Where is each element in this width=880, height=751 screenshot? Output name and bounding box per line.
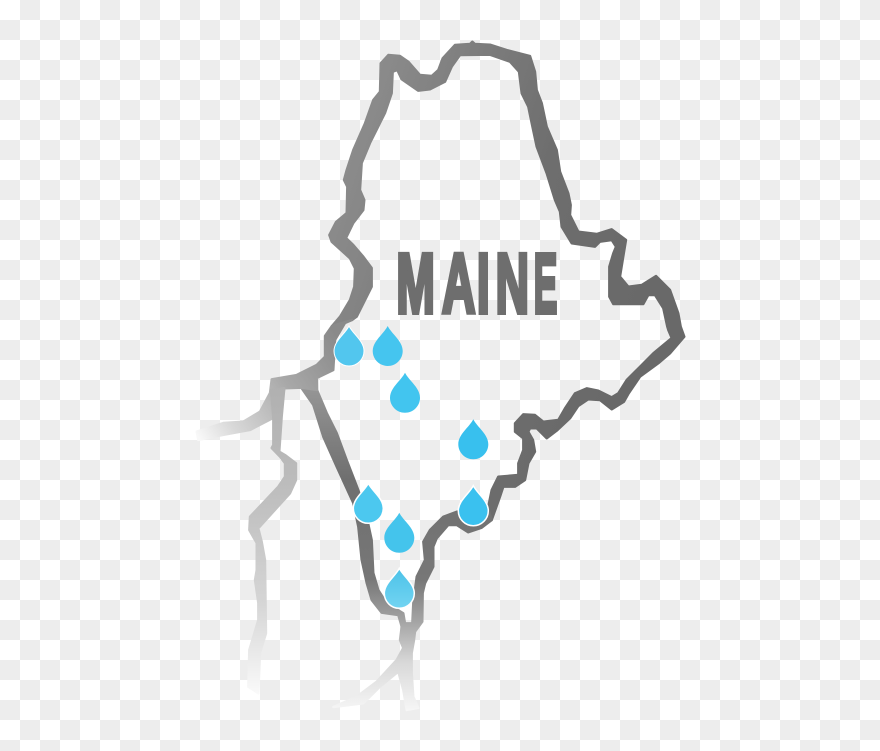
- outline: western branch fading to the left: [197, 320, 352, 440]
- icon: water drop 2: [373, 326, 403, 366]
- icon: water drop 3: [390, 373, 420, 413]
- icon: water drop 6: [353, 483, 383, 523]
- outline: southern border and coast converging to the tip: [302, 380, 492, 710]
- icon: water drop 8: [384, 568, 414, 608]
- title: MAINE: MAIN: [396, 238, 529, 331]
- icon: water drop 1: [334, 326, 364, 366]
- icon: water drop 5: [458, 486, 488, 526]
- icon: water drop 7: [384, 513, 414, 553]
- outline: western strand fading downward: [248, 388, 296, 693]
- icon: water drop 4: [458, 419, 488, 459]
- outline: northern Maine and eastern coast: [329, 42, 684, 520]
- title: MAINE: E: [534, 237, 557, 331]
